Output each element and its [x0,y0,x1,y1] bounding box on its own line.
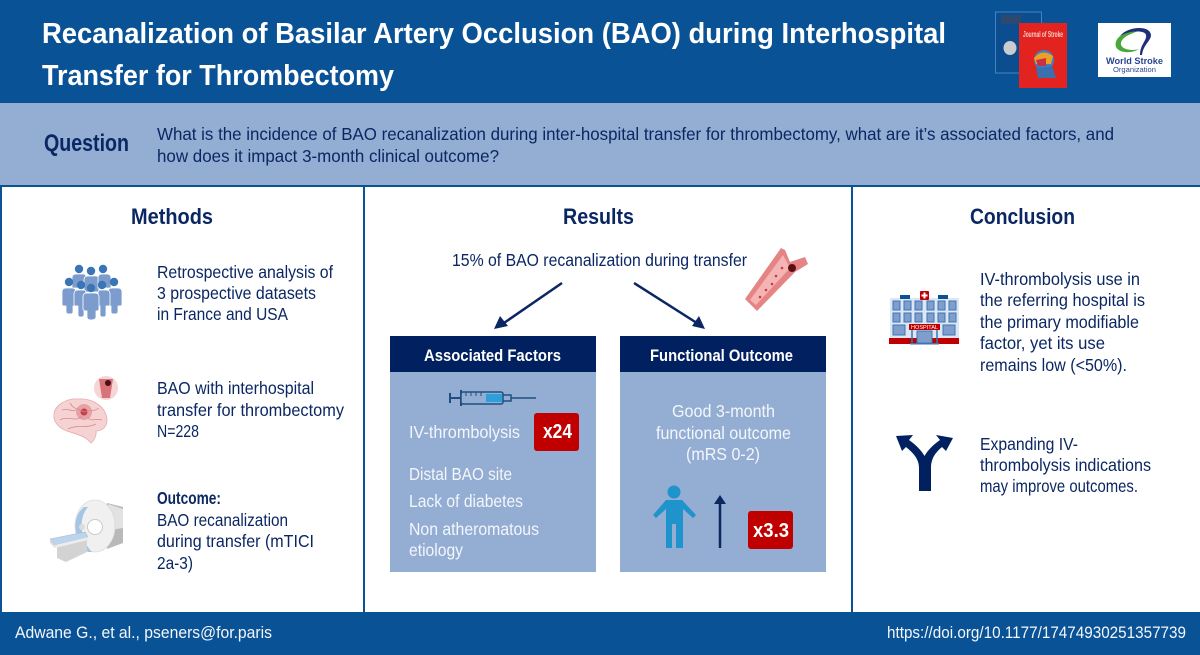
conclusion text: IV-thrombolysis: the primary modifiable [980,312,1139,332]
conclusion text: IV-thrombolysis: remains low (<50%). [980,355,1127,375]
panel: conclusion [852,186,1200,613]
icon: group of people [62,265,122,320]
icon: MRI scanner [50,500,123,562]
methods text: population [157,378,344,441]
functional outcome header: Functional Outcome [650,346,793,365]
arrow: increase [714,495,726,548]
outcome text [656,401,791,464]
outcome text: Good 3-month [672,401,775,421]
header band [0,0,1200,103]
outcome text: (mRS 0-2) [686,444,760,464]
footer band [0,613,1200,655]
methods text: design [157,262,333,324]
citation: Adwane G., et al., pseners@for.paris [15,624,272,642]
badge: x24: x24 [543,421,573,443]
title [42,18,946,92]
methods text: outcome: 2a-3) [157,553,193,573]
other factors: Non atheromatous [409,519,539,539]
methods text: outcome: during transfer (mTICI [157,531,314,551]
methods text: population: N=228 [157,421,199,441]
sub-panel: associated factors [390,336,596,572]
arrow: to associated factors [494,283,562,329]
methods text: outcome [157,488,314,573]
question text: how does it impact 3-month clinical outcome? [157,146,499,166]
other factors: Distal BAO site [409,464,512,484]
other factors [409,464,539,560]
results heading: Results [563,204,634,229]
other factors: etiology [409,540,463,560]
icon: journal covers: Journal of Stroke [1023,30,1063,39]
methods text: population: BAO with interhospital [157,378,314,398]
methods text: outcome: Outcome: [157,488,221,508]
title: Recanalization of Basilar Artery Occlusion (BAO) during Interhospital [42,18,946,50]
methods heading: Methods [131,204,213,229]
icon: brain with occluded vessel [54,376,118,443]
methods text: design: Retrospective analysis of [157,262,333,282]
badge: x3.3 [748,511,793,549]
conclusion text: IV-thrombolysis: IV-thrombolysis use in [980,269,1140,289]
functional outcome header [620,336,826,372]
question heading: Question [44,130,129,157]
question text [157,124,1114,166]
conclusion text: expanding: may improve outcomes. [980,476,1138,496]
associated factors header [390,336,596,372]
conclusion text: expanding: Expanding IV- [980,434,1078,454]
methods text: population: transfer for thrombectomy [157,400,344,420]
icon: syringe [450,390,536,406]
methods text: outcome: BAO recanalization [157,510,288,530]
key result text: 15% of BAO recanalization during transfer [452,250,747,270]
panel: results [364,186,852,613]
badge: x24 [534,413,579,451]
sub-panel: functional outcome [620,336,826,572]
conclusion text: expanding: thrombolysis indications [980,455,1151,475]
arrow: to functional outcome [634,283,705,329]
icon: hospital: HOSPITAL [911,325,938,331]
conclusion heading: Conclusion [970,204,1075,229]
icon: hospital [889,291,959,344]
factor: IV-thrombolysis: IV-thrombolysis [409,422,520,442]
icon: World Stroke Organization logo: Organization [1113,65,1156,74]
conclusion text: expanding [980,434,1151,496]
methods text: design: in France and USA [157,304,288,324]
outcome text: functional outcome [656,423,791,443]
panel: methods [1,186,364,613]
conclusion text: IV-thrombolysis [980,269,1145,375]
icon: person [653,486,696,548]
associated factors header: Associated Factors [424,346,561,365]
conclusion text: IV-thrombolysis: factor, yet its use [980,333,1105,353]
icon: journal covers [996,12,1067,88]
conclusion text: IV-thrombolysis: the referring hospital is [980,290,1145,310]
icon: World Stroke Organization logo: World Stroke [1106,56,1163,67]
badge: x3.3: x3.3 [753,520,789,542]
icon: blood vessel with clot [745,248,808,311]
question text: What is the incidence of BAO recanalization during inter-hospital transfer for thrombectomy, what are it’s associated factors, and [157,124,1114,144]
icon: World Stroke Organization logo [1098,23,1171,77]
icon: forking arrow [896,435,953,491]
methods text: design: 3 prospective datasets [157,283,316,303]
question band [0,103,1200,186]
other factors: Lack of diabetes [409,491,523,511]
title: Transfer for Thrombectomy [42,60,394,92]
